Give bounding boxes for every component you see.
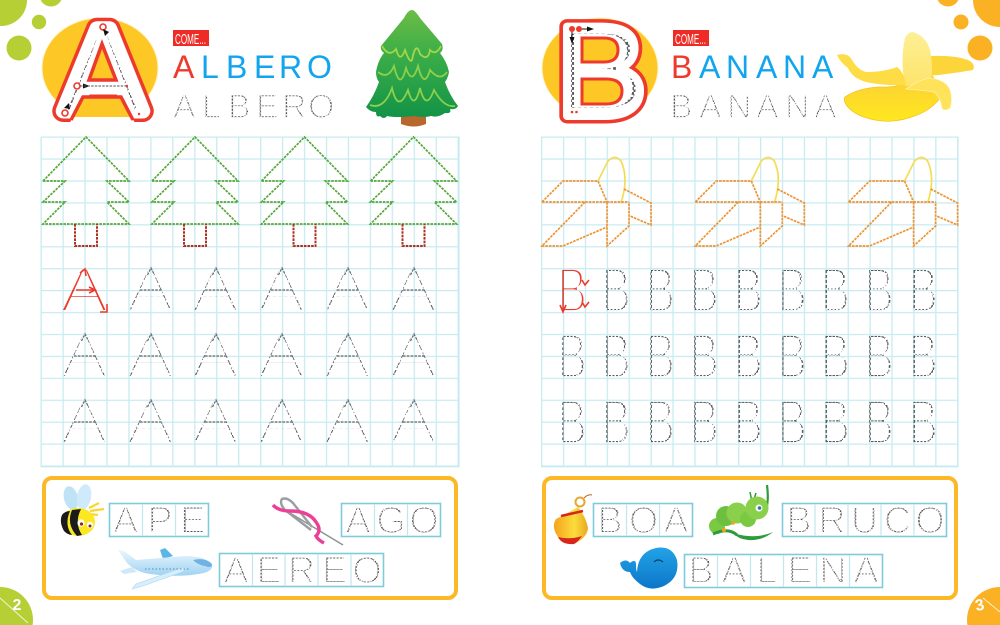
letter A body: A xyxy=(63,3,143,137)
stroke order guide for A: A xyxy=(60,2,144,141)
yellow disc behind A xyxy=(42,18,158,118)
left page header: big letter A xyxy=(42,2,158,141)
word box: BRUCO: BRUCO xyxy=(786,500,945,542)
tree tracing 2 xyxy=(152,137,238,246)
stroke order guide for B: B xyxy=(554,4,648,138)
page number 3: 3 xyxy=(974,597,986,615)
dashed tree tracing row xyxy=(43,137,456,246)
icon: peeled banana xyxy=(837,32,974,121)
word box: BALENA: BALENA xyxy=(688,550,879,592)
word box: AGO: AGO xyxy=(345,500,439,542)
red model A: A xyxy=(60,254,110,326)
tree tracing 4 xyxy=(370,137,456,246)
grid right and bottom edges, right xyxy=(541,136,958,467)
left page tracing grid xyxy=(40,136,460,467)
icon: caterpillar on leaf xyxy=(709,485,773,540)
icon: needle and thread xyxy=(273,498,343,545)
word box: APE: APE xyxy=(113,500,205,542)
icon: bee xyxy=(61,483,104,536)
icon: whale xyxy=(620,548,677,589)
red arrows on model B xyxy=(560,280,589,312)
right page dashed word: banana: BANANA xyxy=(670,88,837,126)
letter B body: B xyxy=(556,0,647,144)
dashed banana tracing row xyxy=(542,158,958,246)
icon: buoy xyxy=(554,495,592,544)
red model B: B xyxy=(557,254,587,326)
grid right and bottom edges, left xyxy=(40,136,459,467)
tree tracing 3 xyxy=(262,137,348,246)
yellow disc behind B xyxy=(542,18,658,118)
right page label: come: COME... xyxy=(675,31,706,48)
right page label: come xyxy=(673,30,709,48)
stroke order markers for A xyxy=(62,24,140,116)
banana tracing 3 xyxy=(849,158,958,246)
letter A body: A xyxy=(63,3,143,137)
stroke order markers for B xyxy=(569,26,594,113)
right page tracing grid xyxy=(541,136,958,467)
row 2 B: BBBBBBBBB xyxy=(557,320,938,392)
tracing rows of letter A xyxy=(60,254,439,458)
row 3 A: AAAAAA xyxy=(60,386,439,458)
right page header: big letter B xyxy=(542,0,658,144)
decorative orange dots, top right xyxy=(936,0,1000,60)
right page exercise panel xyxy=(544,478,956,598)
tree tracing 1 xyxy=(43,137,129,246)
word box: BOA: BOA xyxy=(597,500,689,542)
right page coloured word: banana: BANANA xyxy=(671,49,834,85)
left page label: come xyxy=(173,30,209,48)
row 1 B: BBBBBBBB xyxy=(601,254,938,326)
page number 2: 2 xyxy=(12,597,22,614)
tracing rows of letter B xyxy=(557,254,938,458)
row 2 A: AAAAAA xyxy=(60,320,439,392)
icon: fir tree xyxy=(366,10,458,126)
red arrows on model A xyxy=(76,269,107,312)
letter B body: B xyxy=(556,0,647,144)
crossbar and apex dashes for the letter A rows xyxy=(74,268,425,422)
row 1 A: AAAAA xyxy=(126,254,439,326)
icon: airplane xyxy=(118,548,212,589)
row 3 B: BBBBBBBBB xyxy=(557,386,938,458)
decorative green dots, top left xyxy=(0,0,62,60)
left page coloured word: albero: ALBERO xyxy=(173,49,332,85)
banana tracing 2 xyxy=(695,158,804,246)
page number 2 xyxy=(0,587,33,625)
word box: AEREO: AEREO xyxy=(223,550,382,592)
left page label: come: COME... xyxy=(175,31,206,48)
left page exercise panel xyxy=(44,478,456,598)
banana tracing 1 xyxy=(542,158,651,246)
left page dashed word: albero: ALBERO xyxy=(173,88,334,126)
page number 3 xyxy=(967,587,1000,625)
